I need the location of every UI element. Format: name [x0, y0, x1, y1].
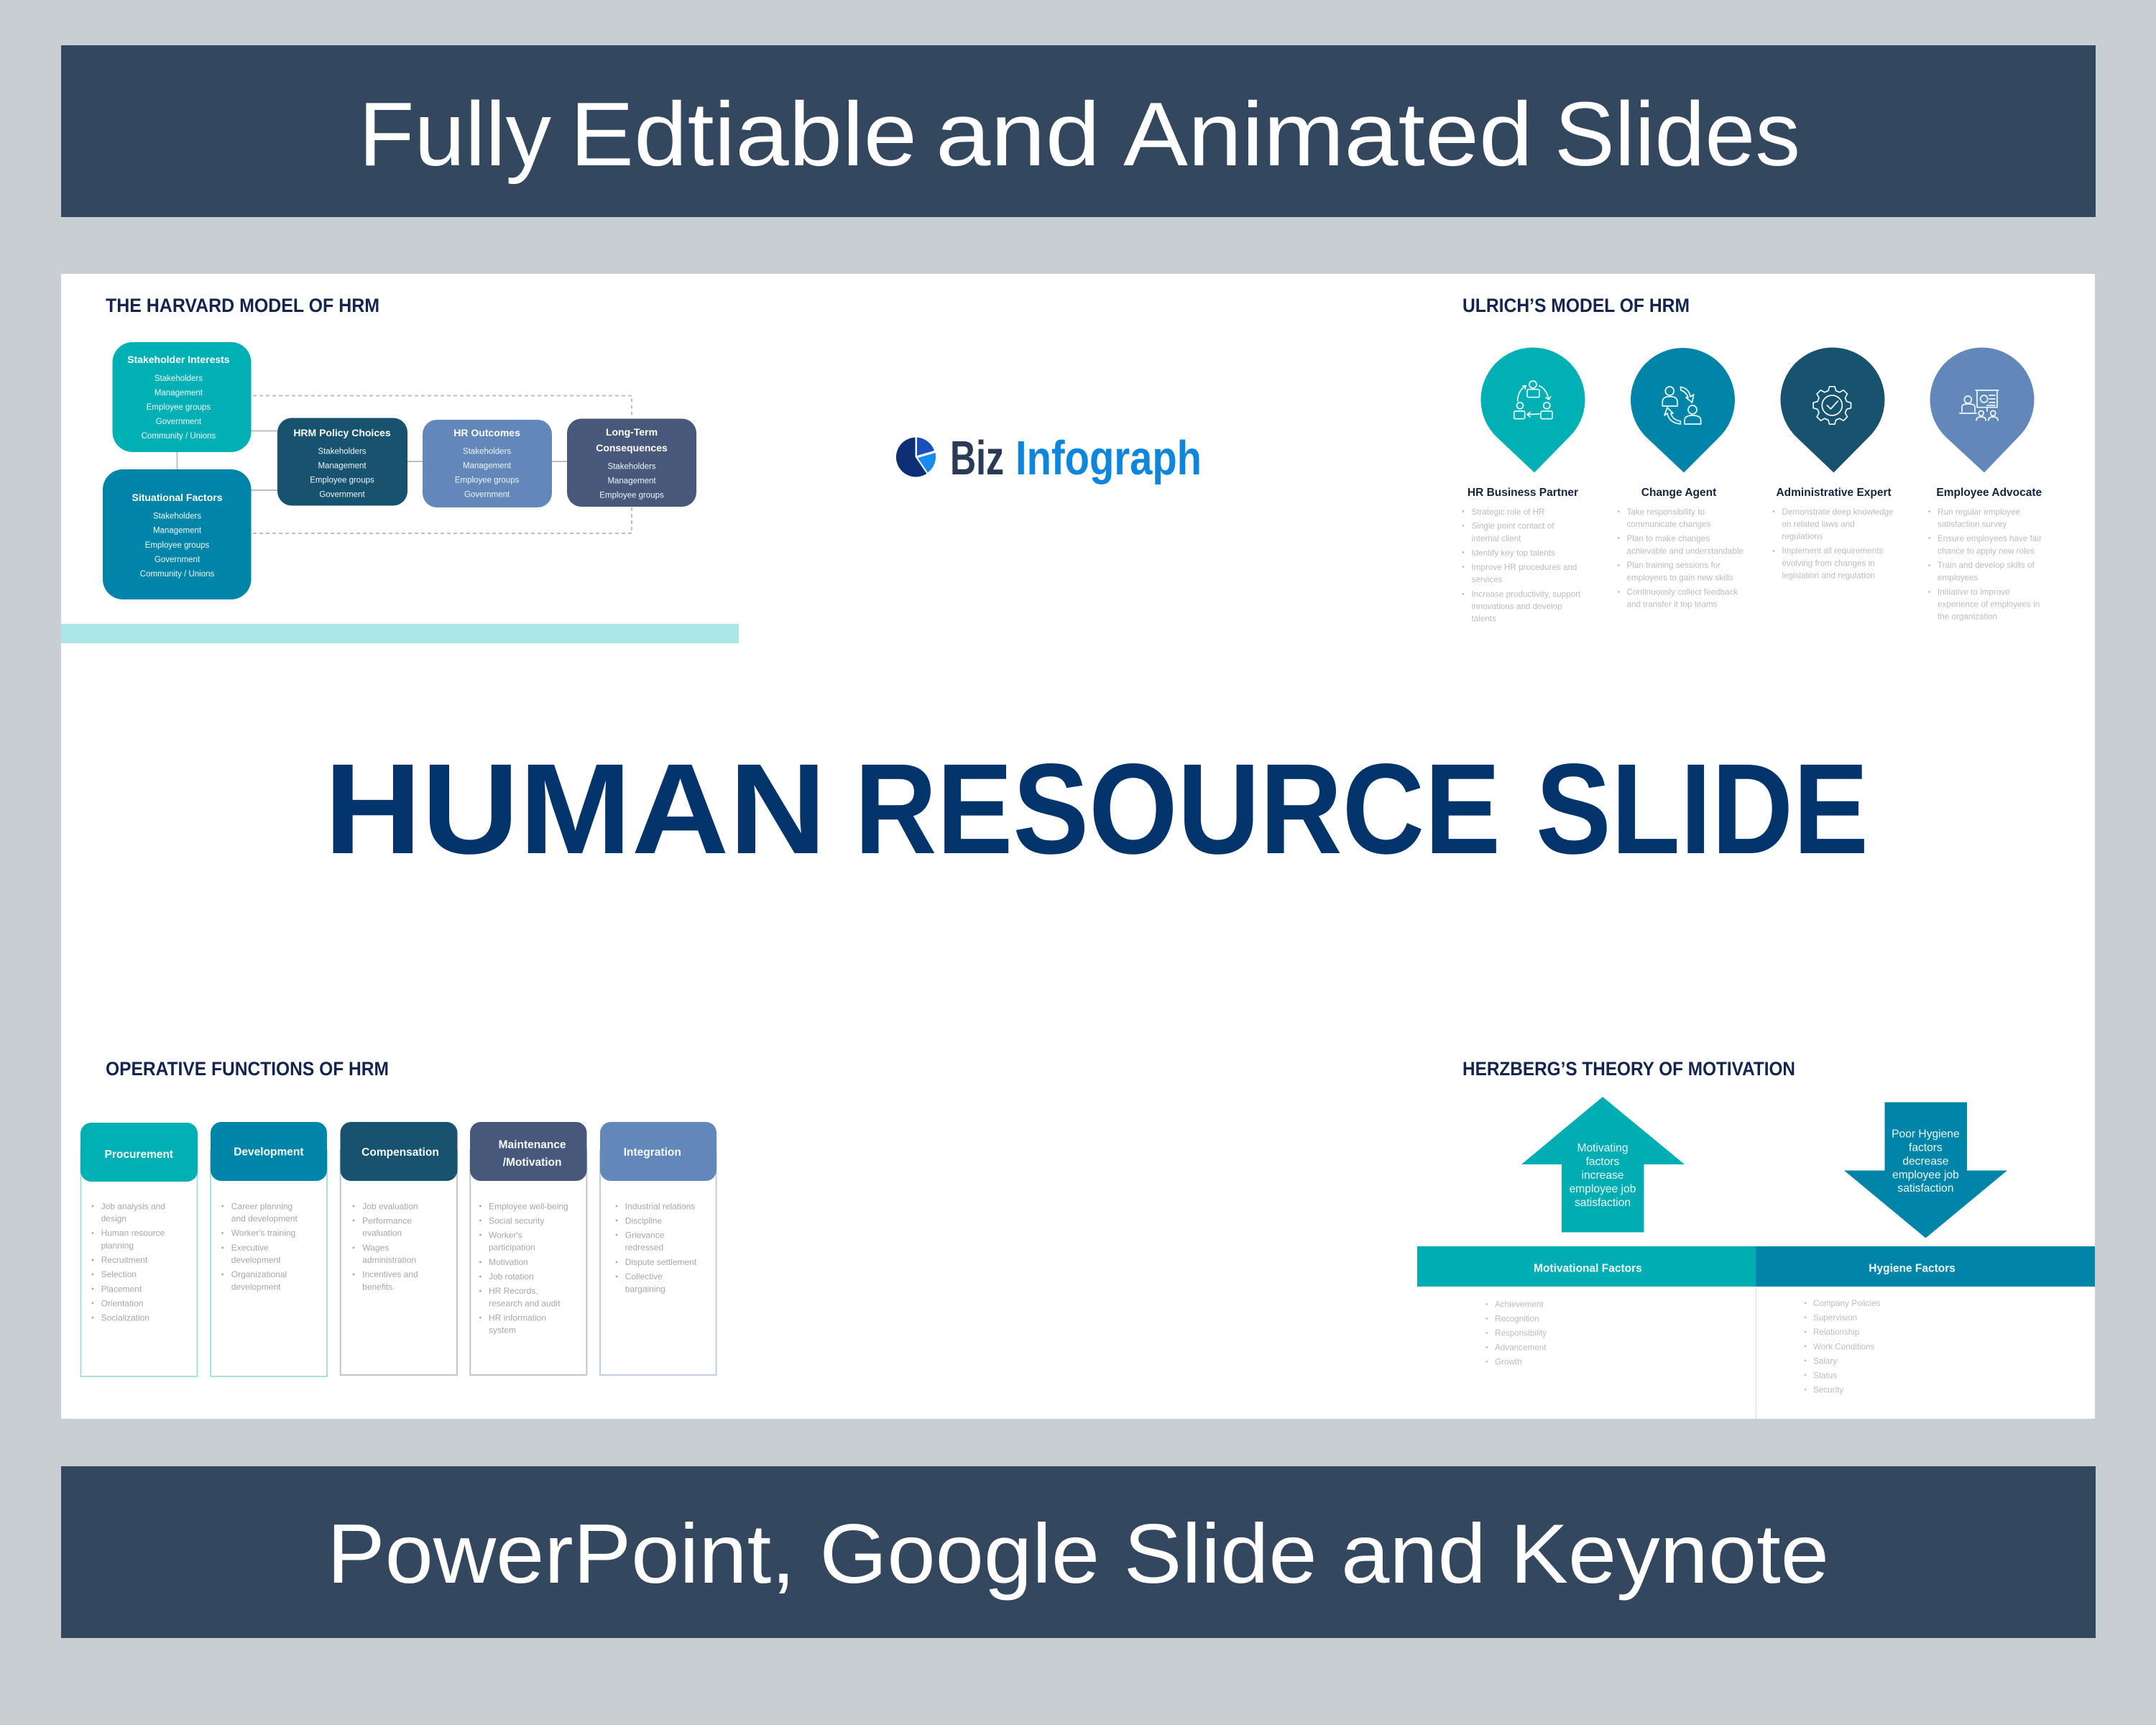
card: Maintenance / Motivation: research and audit: [489, 1298, 561, 1308]
box: Stakeholder Interests: Government: [156, 418, 202, 426]
card: Maintenance / Motivation: Job rotation: [489, 1271, 534, 1282]
card: Procurement: Placement: [101, 1284, 142, 1294]
card: Procurement: Socialization: [101, 1312, 149, 1322]
list: hygiene factors: Company Policies: [1813, 1299, 1881, 1308]
column: Employee Advocate: [1928, 487, 2042, 621]
box: HRM Policy Choices: Employee groups: [310, 477, 374, 485]
column: Employee Advocate: Employee Advocate: [1936, 487, 2042, 499]
card: Maintenance / Motivation: Maintenance: [499, 1139, 566, 1151]
column: Change Agent: Continuously collect feedback: [1627, 588, 1738, 597]
list: hygiene factors: Security: [1813, 1386, 1843, 1395]
card: Procurement: Selection: [101, 1269, 137, 1279]
top banner: Fully: [359, 83, 551, 185]
card: Maintenance / Motivation: HR Records,: [489, 1286, 538, 1296]
panel: Operative functions of HRM: [80, 1058, 717, 1376]
arrow: poor hygiene factors down: satisfaction: [1897, 1182, 1953, 1195]
column: HR Business Partner: services: [1472, 575, 1503, 584]
box: HR Outcomes: Stakeholders: [463, 447, 511, 456]
box: Stakeholder Interests: [112, 342, 252, 452]
column: Change Agent: Plan to make changes: [1627, 534, 1710, 543]
column: Administrative Expert: Administrative Expert: [1776, 487, 1892, 499]
icon: change people: [1662, 387, 1701, 424]
column: HR Business Partner: HR Business Partner: [1468, 487, 1578, 499]
main title: HUMAN: [324, 737, 826, 880]
column: Administrative Expert: Implement all requirements: [1782, 546, 1884, 556]
pin: Change Agent: [1631, 348, 1735, 473]
column: Change Agent: and transfer it top teams: [1627, 599, 1718, 610]
column: HR Business Partner: Strategic role of HR: [1472, 507, 1544, 517]
card: Maintenance / Motivation: system: [489, 1325, 516, 1335]
arrow: poor hygiene factors down: [1844, 1103, 2007, 1238]
card: Compensation: benefits: [362, 1282, 392, 1292]
column: HR Business Partner: innovations and develop: [1472, 602, 1562, 611]
column: Change Agent: Plan training sessions for: [1627, 561, 1720, 570]
card: Integration: Integration: [624, 1146, 681, 1159]
column: Employee Advocate: Run regular employee: [1938, 507, 2020, 517]
top banner: Edtiable: [570, 83, 917, 185]
card: Integration: Grievance: [625, 1230, 665, 1240]
box: Situational Factors: Stakeholders: [153, 512, 201, 521]
bar: Motivational Factors: Motivational Factors: [1534, 1263, 1642, 1275]
icon: pie chart: [896, 437, 936, 477]
box: Long-Term Consequences: Employee groups: [599, 492, 664, 500]
box: Long-Term Consequences: Management: [607, 477, 656, 486]
box: HR Outcomes: HR Outcomes: [453, 427, 520, 438]
main title: SLIDE: [1536, 737, 1869, 880]
list: hygiene factors: [1805, 1299, 1881, 1395]
column: Change Agent: employees to gain new skills: [1627, 574, 1733, 582]
list: motivational factors: Achievement: [1495, 1300, 1544, 1310]
box: HRM Policy Choices: [277, 418, 407, 506]
card: Maintenance / Motivation: HR information: [489, 1312, 546, 1322]
card: Procurement: [80, 1123, 198, 1376]
box: Situational Factors: Community / Unions: [140, 570, 215, 579]
heading: Operative functions: OPERATIVE FUNCTIONS OF HRM: [106, 1058, 389, 1080]
card: Compensation: Compensation: [361, 1146, 439, 1159]
column: Change Agent: Change Agent: [1641, 487, 1716, 499]
card: Development: Career planning: [231, 1201, 292, 1211]
column: HR Business Partner: Single point contact of: [1472, 522, 1554, 531]
column: Employee Advocate: satisfaction survey: [1938, 520, 2007, 529]
light teal band: [61, 624, 739, 643]
box: Situational Factors: Management: [153, 527, 202, 535]
card: Compensation: Wages: [362, 1243, 389, 1253]
bar: Hygiene Factors: Hygiene Factors: [1869, 1263, 1955, 1275]
column: Employee Advocate: Ensure employees have fair: [1938, 534, 2042, 543]
card: Compensation: evaluation: [362, 1228, 402, 1238]
top banner: [61, 45, 2096, 217]
arrow: poor hygiene factors down: decrease: [1902, 1156, 1948, 1167]
list: motivational factors: Recognition: [1495, 1314, 1539, 1323]
column: Administrative Expert: Demonstrate deep knowledge: [1782, 507, 1894, 517]
main title: RESOURCE: [854, 737, 1501, 880]
card: Development: Development: [234, 1146, 304, 1158]
column: Employee Advocate: experience of employees in: [1938, 599, 2040, 610]
icon: presenter with board: [1960, 390, 1999, 420]
card: Development: development: [231, 1255, 281, 1265]
card: Integration: bargaining: [625, 1284, 665, 1294]
box: HR Outcomes: Employee groups: [455, 477, 520, 485]
card: Procurement: Human resource: [101, 1228, 165, 1238]
card: Maintenance / Motivation: participation: [489, 1243, 535, 1253]
top banner: Slides: [1554, 83, 1800, 185]
column: Administrative Expert: evolving from changes in: [1782, 559, 1875, 568]
card: Integration: Discipline: [625, 1215, 662, 1225]
column: Employee Advocate: chance to apply new roles: [1938, 546, 2035, 556]
card: Maintenance / Motivation: Social security: [489, 1215, 544, 1225]
pin: Employee Advocate: [1930, 348, 2034, 473]
column: HR Business Partner: [1462, 487, 1581, 624]
card: Procurement: Recruitment: [101, 1255, 148, 1265]
panel: Herzberg's theory of motivation: [1417, 1058, 2095, 1419]
pin: HR Business Partner: [1480, 347, 1585, 473]
box: Stakeholder Interests: Stakeholders: [155, 374, 203, 383]
bottom banner: PowerPoint, Google Slide and Keynote: [327, 1506, 1829, 1601]
column: Employee Advocate: employees: [1938, 574, 1978, 582]
arrow: motivating factors up: employee job: [1570, 1183, 1636, 1195]
card: Maintenance / Motivation: /Motivation: [503, 1156, 562, 1169]
column: Administrative Expert: [1773, 487, 1894, 581]
card: Integration: Industrial relations: [625, 1201, 695, 1211]
card: Integration: Collective: [625, 1271, 663, 1282]
bottom banner: [61, 1466, 2096, 1638]
column: HR Business Partner: internal client: [1472, 534, 1521, 543]
list: motivational factors: Advancement: [1495, 1343, 1547, 1353]
box: HRM Policy Choices: Stakeholders: [318, 447, 367, 456]
list: hygiene factors: Work Conditions: [1813, 1342, 1875, 1351]
white slide panel: [61, 274, 2095, 1419]
pin: Administrative Expert: [1781, 348, 1884, 473]
box: HRM Policy Choices: Government: [319, 491, 365, 500]
card: Development: Executive: [231, 1243, 269, 1253]
column: Change Agent: communicate changes: [1627, 520, 1711, 529]
card: Compensation: Job evaluation: [362, 1201, 418, 1211]
box: Stakeholder Interests: Employee groups: [147, 403, 211, 412]
card: Maintenance / Motivation: Employee well-being: [489, 1201, 568, 1211]
column: HR Business Partner: Identify key top talents: [1472, 548, 1555, 558]
list: motivational factors: Responsibility: [1495, 1328, 1547, 1338]
list: hygiene factors: Relationship: [1813, 1328, 1860, 1337]
box: Situational Factors: Situational Factors: [132, 492, 223, 503]
card: Development: and development: [231, 1214, 298, 1224]
card: Maintenance / Motivation: Worker's: [489, 1230, 522, 1240]
card: Development: Organizational: [231, 1269, 287, 1279]
card: Integration: redressed: [625, 1243, 663, 1253]
column: Administrative Expert: regulations: [1782, 532, 1823, 541]
arrow: poor hygiene factors down: Poor Hygiene: [1892, 1128, 1960, 1141]
arrow: motivating factors up: increase: [1582, 1169, 1623, 1182]
box: HR Outcomes: Management: [463, 461, 512, 470]
box: Long-Term Consequences: Stakeholders: [607, 462, 656, 471]
box: HRM Policy Choices: Management: [318, 461, 367, 470]
list: motivational factors: Growth: [1495, 1358, 1522, 1367]
card: Maintenance / Motivation: [470, 1122, 586, 1375]
panel: Harvard model of HRM: [61, 295, 739, 643]
list: hygiene factors: Status: [1813, 1371, 1837, 1380]
connectors between boxes: [177, 395, 632, 533]
arrow: motivating factors up: [1521, 1097, 1685, 1232]
icon: gear with check: [1813, 387, 1851, 424]
heading: Herzberg's theory: HERZBERG’S THEORY OF MOTIVATION: [1462, 1058, 1795, 1080]
card: Compensation: [341, 1122, 457, 1375]
list: hygiene factors: Supervision: [1813, 1313, 1857, 1322]
bar: Motivational Factors: [1417, 1246, 1756, 1287]
card: Integration: [600, 1122, 717, 1375]
column: Administrative Expert: on related laws and: [1782, 520, 1855, 529]
card: Development: [211, 1122, 327, 1376]
card: Compensation: administration: [362, 1255, 416, 1265]
card: Compensation: Incentives and: [362, 1269, 418, 1279]
box: Situational Factors: [103, 469, 252, 599]
box: Long-Term Consequences: [567, 418, 696, 507]
top banner: and: [936, 83, 1100, 185]
card: Development: development: [231, 1282, 281, 1292]
arrow: motivating factors up: satisfaction: [1575, 1197, 1631, 1209]
box: HR Outcomes: [423, 420, 552, 507]
box: Situational Factors: Employee groups: [145, 541, 209, 550]
column: Administrative Expert: legislation and regulation: [1782, 571, 1875, 581]
logo: Biz Infograph: Biz: [950, 431, 1004, 485]
top banner: Animated: [1123, 83, 1533, 185]
column: HR Business Partner: talents: [1472, 614, 1496, 624]
column: Employee Advocate: the organization: [1938, 612, 1997, 621]
card: Maintenance / Motivation: Motivation: [489, 1257, 528, 1267]
arrow: motivating factors up: factors: [1586, 1156, 1620, 1168]
column: Change Agent: achievable and understandable: [1627, 546, 1743, 556]
logo: Biz Infograph: [896, 431, 1202, 485]
column: HR Business Partner: Improve HR procedures and: [1472, 563, 1577, 572]
box: Stakeholder Interests: Management: [155, 389, 203, 397]
card: Procurement: Job analysis and: [101, 1201, 165, 1211]
box: Long-Term Consequences: Long-Term: [606, 426, 658, 438]
column: Employee Advocate: Train and develop skills of: [1938, 561, 2035, 570]
box: HR Outcomes: Government: [464, 491, 510, 500]
box: Long-Term Consequences: Consequences: [596, 442, 668, 454]
card: Development: Worker's training: [231, 1228, 295, 1238]
icon: team cycle: [1514, 381, 1552, 419]
column: Change Agent: [1618, 487, 1743, 610]
heading: Harvard model: THE HARVARD MODEL OF HRM: [106, 295, 379, 316]
arrow: poor hygiene factors down: employee job: [1892, 1169, 1959, 1181]
column: Employee Advocate: Initiative to improve: [1938, 588, 2010, 597]
logo: Biz Infograph: Infograph: [1015, 431, 1202, 485]
card: Procurement: design: [101, 1214, 126, 1224]
card: Procurement: Procurement: [104, 1149, 173, 1161]
card: Integration: Dispute settlement: [625, 1257, 697, 1267]
arrow: poor hygiene factors down: factors: [1909, 1141, 1943, 1154]
card: Compensation: Performance: [362, 1215, 412, 1225]
list: hygiene factors: Salary: [1813, 1356, 1837, 1366]
box: Stakeholder Interests: Stakeholder Interests: [127, 354, 230, 365]
main title: [324, 737, 1869, 880]
box: Situational Factors: Government: [155, 556, 201, 564]
heading: Ulrich's model: ULRICH’S MODEL OF HRM: [1462, 295, 1690, 316]
bar: Hygiene Factors: [1756, 1246, 2095, 1287]
box: HRM Policy Choices: HRM Policy Choices: [293, 427, 391, 438]
arrow: motivating factors up: Motivating: [1577, 1142, 1628, 1154]
card: Procurement: planning: [101, 1241, 134, 1251]
box: Stakeholder Interests: Community / Unions: [142, 432, 216, 441]
column: HR Business Partner: Increase productivity, support: [1472, 589, 1581, 599]
card: Procurement: Orientation: [101, 1298, 143, 1308]
list: motivational factors: [1485, 1300, 1547, 1367]
panel: Ulrich's model of HRM: [1462, 295, 2042, 624]
column: Change Agent: Take responsibility to: [1627, 507, 1705, 517]
